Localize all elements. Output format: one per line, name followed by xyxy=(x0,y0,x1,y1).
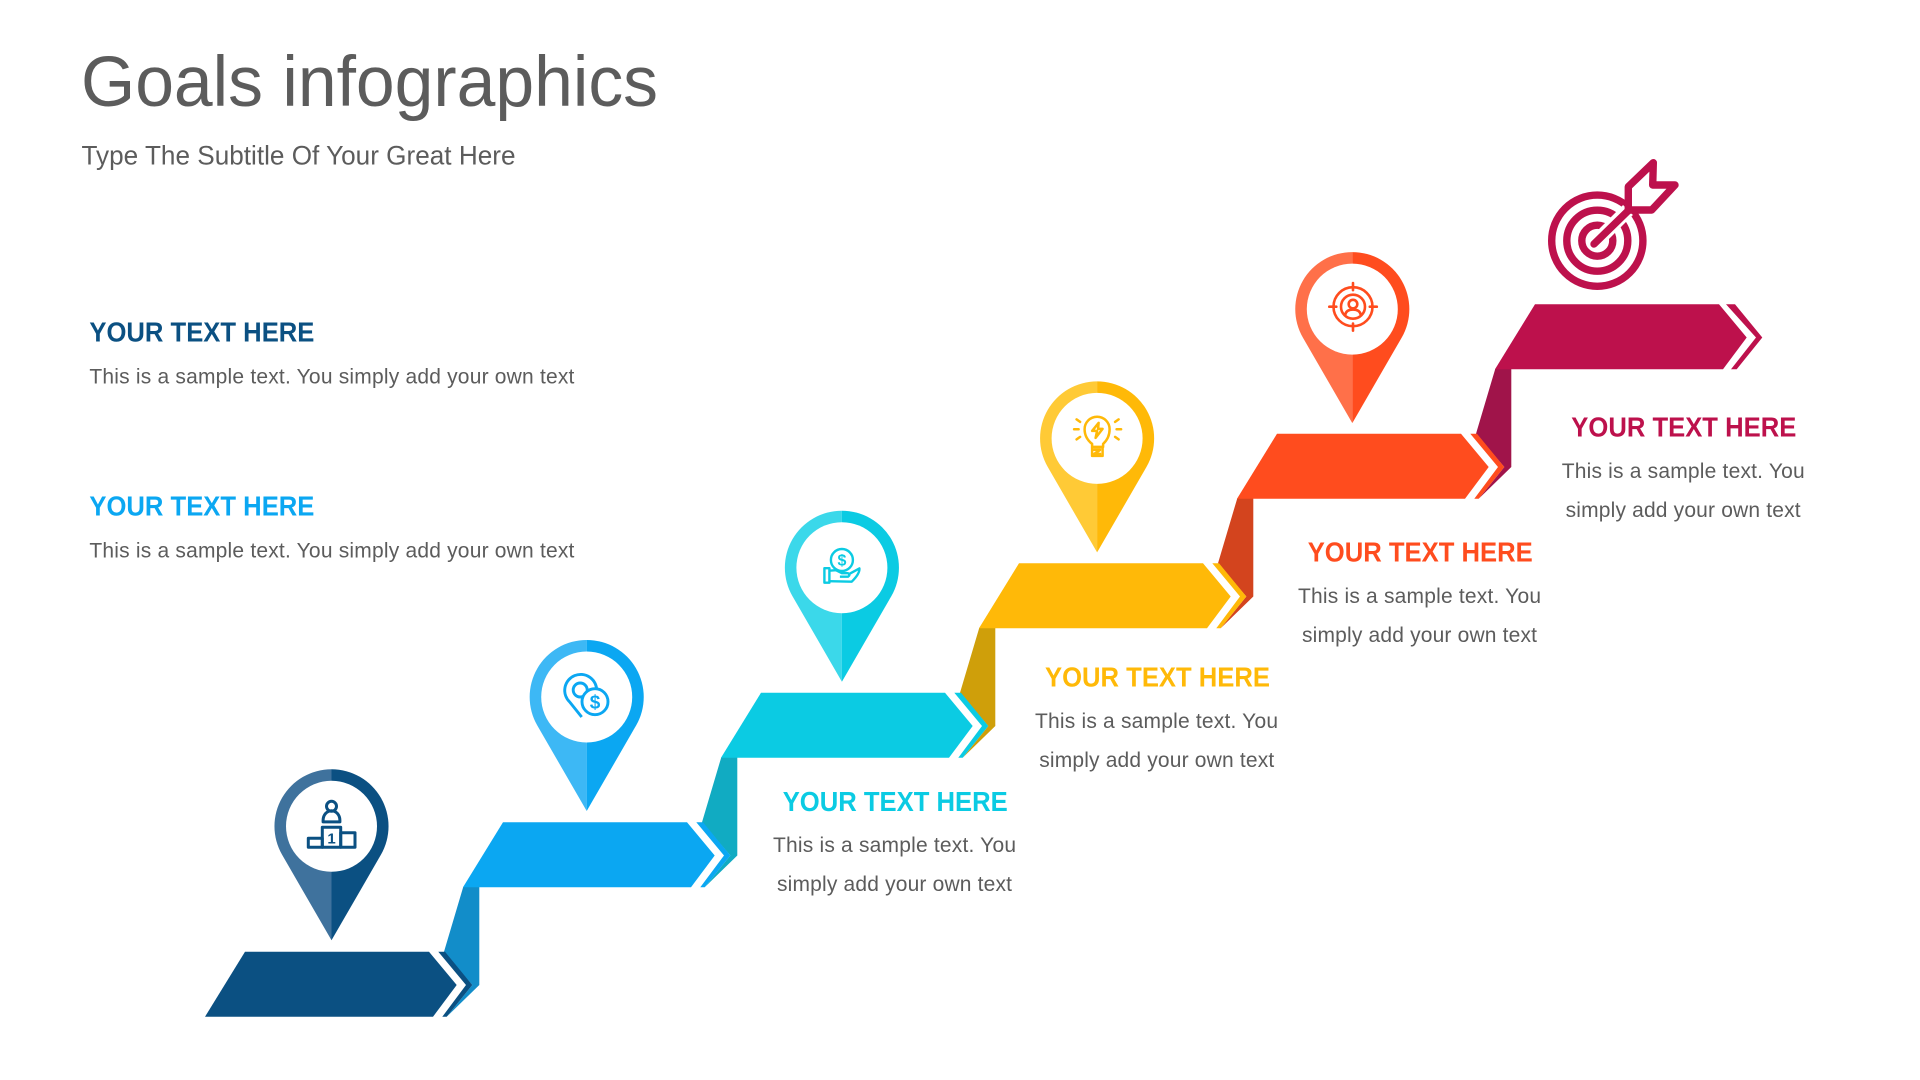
left text block: navy: YOUR TEXT HERE xyxy=(89,316,314,348)
text block: cyan step: YOUR TEXT HERE xyxy=(783,786,1008,817)
left text block: blue: YOUR TEXT HERE xyxy=(89,490,314,522)
text block: yellow step: YOUR TEXT HERE xyxy=(1045,662,1270,692)
connector: blue to cyan xyxy=(702,757,737,887)
text block: cyan step: This is a sample text. You xyxy=(773,834,1016,857)
text block: yellow step: simply add your own text xyxy=(1039,749,1274,772)
connector: cyan to yellow xyxy=(960,628,995,758)
step arrow 3: cyan xyxy=(721,693,988,758)
text block: cyan step: simply add your own text xyxy=(777,873,1012,896)
map pin 1: podium xyxy=(274,769,389,940)
text block: crimson step: simply add your own text xyxy=(1566,499,1801,522)
text block: orange step: YOUR TEXT HERE xyxy=(1308,536,1533,568)
text block: orange step: This is a sample text. You xyxy=(1298,585,1541,608)
text block: cyan step xyxy=(773,786,1016,896)
text block: crimson step: This is a sample text. You xyxy=(1562,460,1805,483)
step arrow 1: navy xyxy=(205,952,472,1017)
map pin 3: hand with coin xyxy=(785,511,899,682)
icon: person in crosshair xyxy=(1329,283,1377,331)
step arrow 5: orange xyxy=(1237,434,1504,499)
text block: yellow step: This is a sample text. You xyxy=(1035,710,1278,733)
left text block: blue: This is a sample text. You simply add your own text xyxy=(89,540,575,563)
map pin 4: light bulb xyxy=(1040,381,1154,552)
step arrow 6: crimson xyxy=(1495,304,1762,369)
icon: location with dollar coin: $ xyxy=(590,692,601,713)
icon: hand holding coin xyxy=(824,549,859,583)
text block: orange step xyxy=(1298,536,1541,647)
title: Goals infographics xyxy=(81,43,658,122)
step arrow 4: yellow xyxy=(979,563,1246,628)
icon: location with dollar coin xyxy=(565,674,608,717)
left text block: navy: This is a sample text. You simply add your own text xyxy=(89,366,575,389)
icon: hand holding coin: $ xyxy=(837,552,846,569)
map pin 2: location and coin xyxy=(530,640,644,811)
text block: crimson step xyxy=(1562,412,1805,522)
map pin 5: target person xyxy=(1295,252,1409,423)
left text block: navy xyxy=(89,316,575,389)
icon: podium xyxy=(308,801,355,847)
connector: yellow to orange xyxy=(1218,498,1253,628)
icon: target with arrow xyxy=(1552,163,1675,286)
text block: yellow step xyxy=(1035,662,1278,772)
icon: podium: 1 xyxy=(327,830,336,847)
text block: crimson step: YOUR TEXT HERE xyxy=(1571,412,1796,442)
step arrow 2: blue xyxy=(463,822,730,887)
icon: light bulb with bolt xyxy=(1074,417,1121,456)
connector: navy to blue xyxy=(444,887,479,1017)
left text block: blue xyxy=(89,490,575,563)
connector: orange to crimson xyxy=(1476,369,1511,499)
subtitle: Type The Subtitle Of Your Great Here xyxy=(82,140,516,170)
text block: orange step: simply add your own text xyxy=(1302,624,1537,647)
